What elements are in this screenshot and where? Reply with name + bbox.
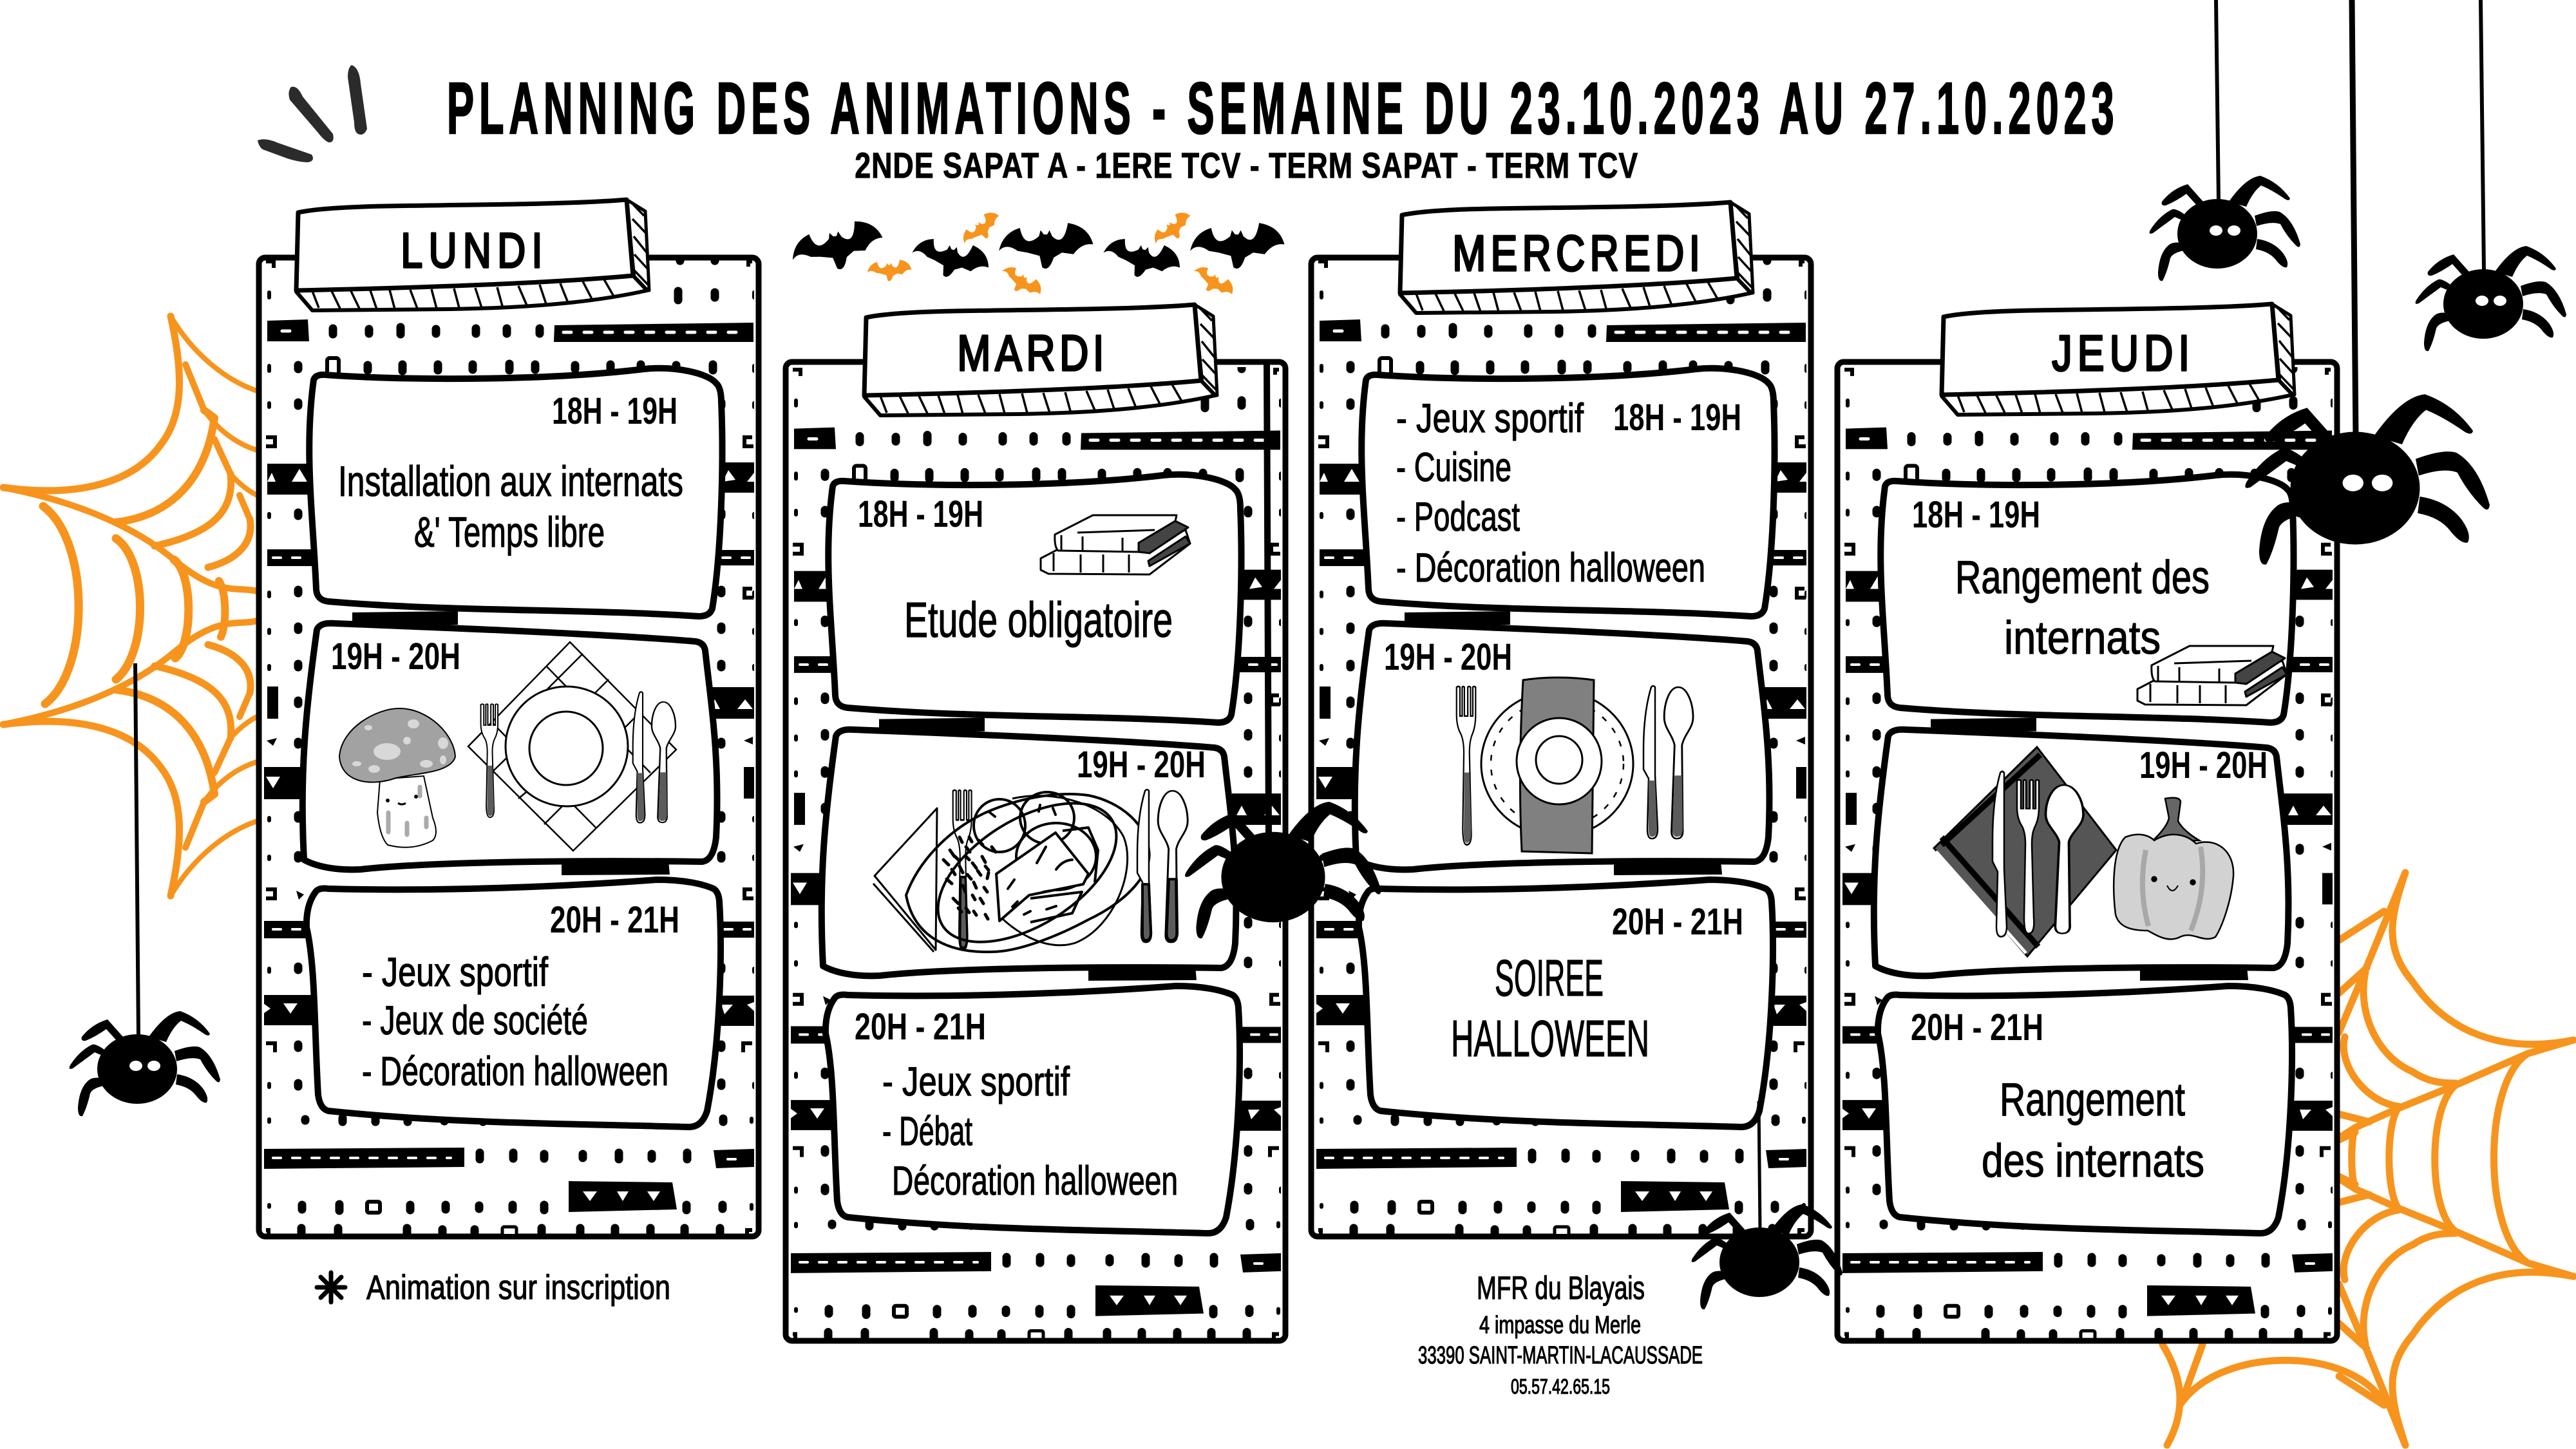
day label: mercredi: MERCREDI [1452,225,1700,281]
subtitle: classes: 2NDE SAPAT A - 1ERE TCV - TERM SAPAT - TERM TCV [855,145,1638,185]
mardi 20h-21h: - Jeux sportif [882,1059,1070,1104]
lundi 18h-19h: &' Temps libre [414,508,605,556]
mardi 20h-21h [855,1006,1178,1204]
icon: mushroom [339,708,455,848]
spider web: right [2163,873,2573,1445]
lundi 19h-20h: 19H - 20H [331,636,460,677]
jeudi 18h-19h: internats [2004,612,2161,664]
address block: 05.57.42.65.15 [1511,1375,1610,1398]
day label: mardi: MARDI [957,325,1104,381]
jeudi 20h-21h [1911,1007,2204,1187]
jeudi 20h-21h: 20H - 21H [1911,1007,2043,1048]
day label: lundi: LUNDI [401,223,542,278]
mardi 18h-19h: Etude obligatoire [904,592,1173,648]
spider: top centre-right [2150,0,2300,281]
mercredi 20h-21h [1451,901,1743,1067]
mercredi 19h-20h [1384,636,1693,853]
lundi 18h-19h: 18H - 19H [552,390,677,432]
spider: on mardi panel [1185,802,1381,938]
mardi 20h-21h: 20H - 21H [855,1006,986,1048]
mercredi 18h-19h: - Décoration halloween [1396,545,1705,591]
spider: large over jeudi [2245,0,2490,565]
mercredi 18h-19h: - Jeux sportif [1396,396,1584,441]
jeudi 20h-21h: des internats [1982,1135,2204,1187]
address block [1418,1270,1703,1398]
day label: jeudi: JEUDI [2052,325,2190,381]
decorative burst marks [258,65,367,162]
bats [788,207,1284,303]
address block: 4 impasse du Merle [1479,1312,1641,1339]
mercredi 19h-20h: 19H - 20H [1384,636,1512,678]
mardi 20h-21h: - Débat [882,1109,972,1154]
panel: jeudi [1837,304,2337,1342]
title: PLANNING DES ANIMATIONS - SEMAINE DU 23.10.2023 AU 27.10.2023 [447,68,2114,149]
panel: lundi [259,200,759,1238]
jeudi 18h-19h [1912,494,2287,705]
mercredi 20h-21h: SOIREE [1495,949,1604,1007]
icon: bell pepper [2114,798,2233,939]
lundi 18h-19h: Installation aux internats [338,457,683,505]
panel: mardi [786,305,1285,1342]
icon: plate of food [873,775,1188,971]
mercredi 18h-19h: - Cuisine [1396,445,1511,490]
mercredi 18h-19h: - Podcast [1396,495,1520,540]
mardi 18h-19h [858,493,1190,648]
spider web: left [3,316,257,896]
spider: bottom of mercredi [1692,1101,1842,1309]
mercredi 20h-21h: 20H - 21H [1612,901,1743,943]
mercredi 18h-19h: 18H - 19H [1613,397,1741,439]
lundi 18h-19h [338,390,683,556]
jeudi 18h-19h: Rangement des [1955,552,2210,603]
address block: MFR du Blayais [1477,1270,1645,1306]
lundi 20h-21h: - Jeux sportif [362,950,548,995]
mardi 19h-20h [873,744,1206,971]
mardi 20h-21h: Décoration halloween [892,1159,1178,1204]
panel: mercredi [1311,202,1811,1238]
mardi 19h-20h: 19H - 20H [1077,744,1206,786]
address block: 33390 SAINT-MARTIN-LACAUSSADE [1418,1342,1703,1369]
lundi 20h-21h: 20H - 21H [550,899,679,941]
mardi 18h-19h: 18H - 19H [858,493,983,535]
spider: top right [2416,0,2566,351]
lundi 20h-21h: - Jeux de société [362,998,588,1043]
icon: dark napkin with cutlery [1934,747,2116,956]
jeudi 20h-21h: Rangement [2000,1074,2185,1126]
jeudi 18h-19h: 18H - 19H [1912,494,2040,536]
mercredi 18h-19h [1396,396,1741,591]
icon: plate with grey napkin and cutlery [1457,677,1693,853]
lundi 19h-20h [331,636,676,851]
mercredi 20h-21h: HALLOWEEN [1451,1010,1649,1067]
lundi 20h-21h [362,899,679,1094]
lundi 20h-21h: - Décoration halloween [362,1049,668,1094]
jeudi 19h-20h [1934,744,2268,956]
jeudi 19h-20h: 19H - 20H [2139,744,2268,786]
footnote: animation sur inscription: Animation sur inscription [366,1269,670,1307]
spider: left [70,663,220,1116]
icon: plate with checked napkin and cutlery [468,642,676,851]
